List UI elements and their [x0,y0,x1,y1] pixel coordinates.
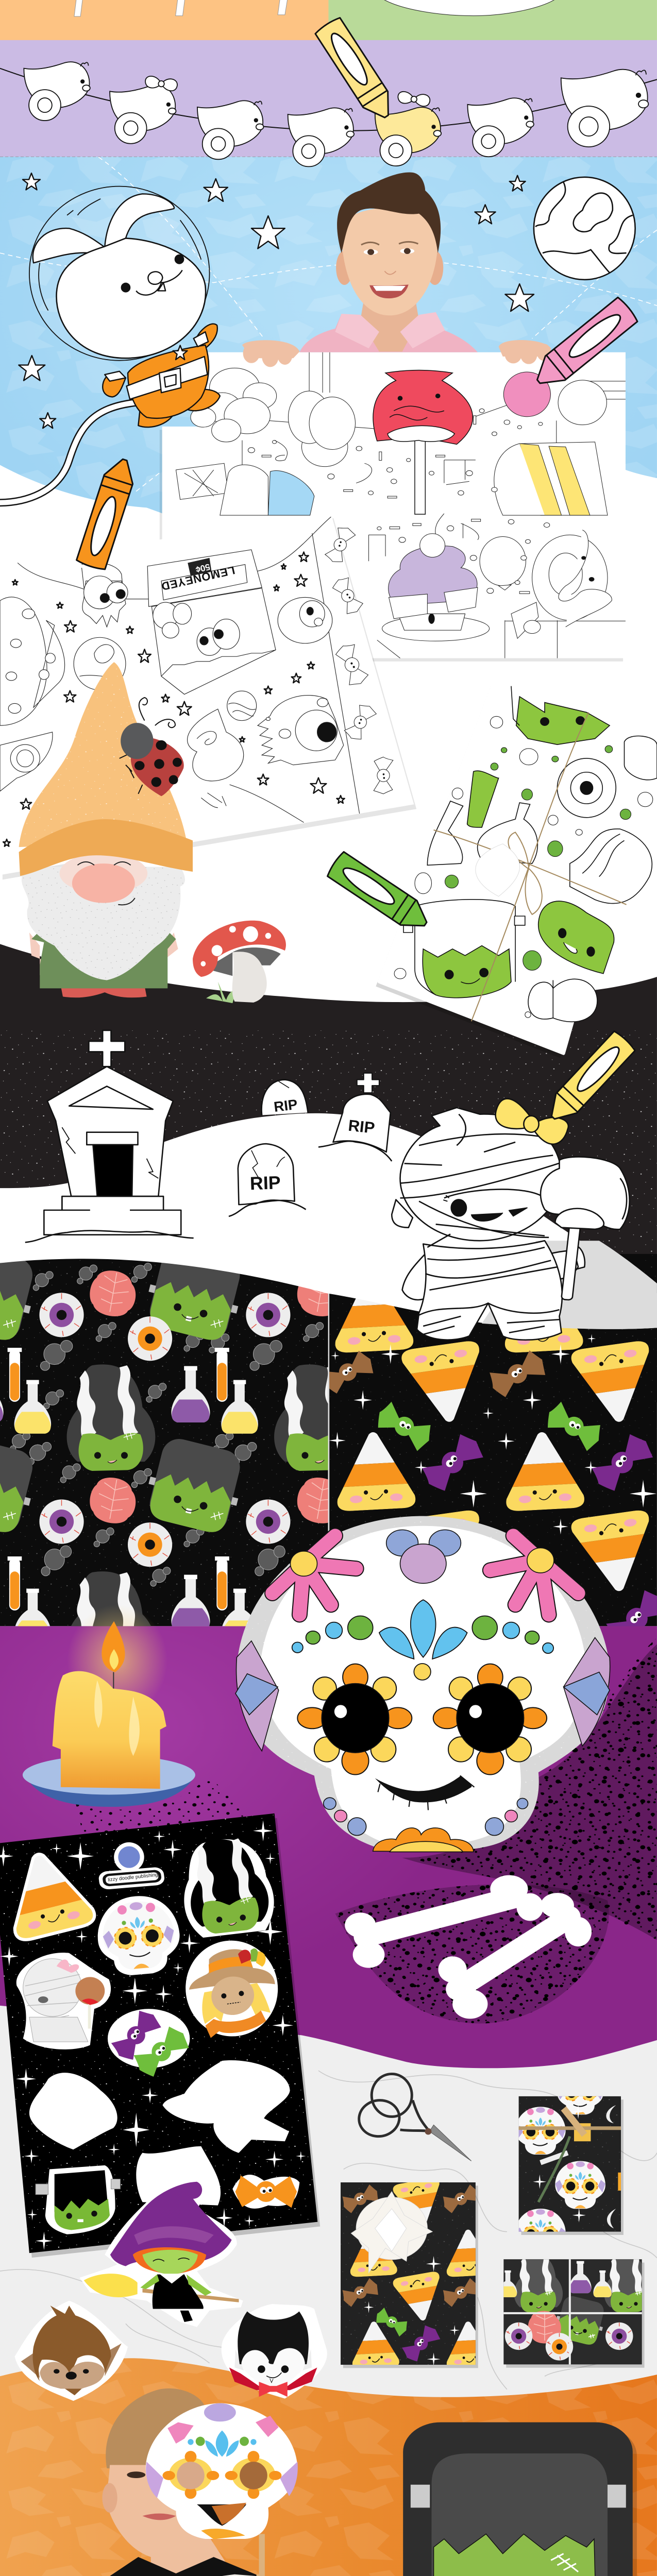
sheet 2 small stars [3,552,345,846]
gnome [19,662,193,997]
scene: coloring sheets, gnome, package [0,455,657,1058]
package [376,681,653,1058]
planet [534,177,635,280]
RIP text [249,1096,376,1194]
lemonade sign: 50¢ [194,562,211,574]
sheet 2 [0,514,416,879]
mushroom [193,921,286,1003]
sheet 1 line art [176,352,626,515]
skull top ornament [290,1530,554,1583]
RIP text: RIP [347,1116,376,1137]
yellow crayon [314,16,399,124]
dashed flight paths [0,157,657,493]
sticker: publisher logo: lizzy doodle publishing [108,1872,158,1883]
candle [23,1605,195,1807]
skull chin ornaments [324,1798,528,1852]
twine and heart tag [434,713,627,1021]
sticker: bride [179,1835,277,1939]
green crayon [326,851,434,936]
sticker: publisher logo [98,1842,165,1890]
sticker: scarecrow [179,1935,284,2042]
white hill [0,1113,657,1329]
sticker: vampire [222,2304,327,2399]
mask stick lower [257,2574,262,2576]
hill shadow [482,1241,657,1329]
left pattern panel [0,1259,328,1626]
sticker: witch [79,2180,243,2327]
bunny hose [0,402,136,503]
sticker sparkles [0,1820,293,2036]
RIP text: RIP [273,1096,298,1115]
purple background [0,1626,657,2068]
black splatter [75,1638,657,2024]
crossed bones [345,1875,592,2019]
sticker sheet blanks [29,2060,290,2206]
pink crayon [529,296,639,394]
boy photo [299,172,478,352]
boy collar [110,2557,260,2576]
skull top flowers [273,1536,578,1615]
scene: plates and balloons [16,2574,637,2576]
scene: top strip [0,0,657,662]
yellow crayon [543,1030,636,1127]
skull right eye [433,1664,547,1775]
gift wrap: candy corn [341,2182,478,2368]
skull side diamonds [235,1638,610,1751]
sticker: sugar skull [94,1893,183,1978]
white gift bow [351,2192,432,2273]
boy hands [242,340,551,367]
mummy candy apple [541,1157,630,1300]
scene: stickers and gift wrap on marble [14,2060,653,2576]
mask stick [259,2534,265,2576]
pink balloon [503,372,607,425]
music notes [275,440,476,485]
top colour bands [0,0,657,591]
scissors [356,2074,471,2161]
sticker: candy corn [0,1841,103,1947]
sticker: mummy [16,1953,111,2049]
chick chain [0,62,657,166]
sheet 1 [160,352,626,662]
sticks [74,0,288,16]
sheet 2 outlined candies [324,524,393,794]
astronaut bunny [29,187,220,427]
sheet 2 line art [0,517,360,822]
gravestones [229,1073,392,1216]
sticker: wrapped candies [108,2006,193,2081]
scene: graveyard and patterns [0,1030,657,1678]
mummy bow [496,1099,568,1144]
sugar skull [235,1516,610,1852]
stars [19,173,534,428]
sticker sheet [0,1814,320,2258]
sticker: werewolf [14,2301,128,2401]
frankenstein plate [403,2422,637,2576]
scene: day of the dead [0,1516,657,2258]
boy with mask: hair and face [102,2388,234,2576]
package art [403,686,657,1022]
sheet sparkles [16,2069,306,2250]
orange crayon [76,455,139,571]
right pattern panel [318,1254,657,1652]
lemonade sign: LEMONEYED [160,564,236,593]
package dots [394,716,653,1018]
RIP text: RIP [249,1172,281,1194]
gift wrap: sugar skulls [518,2096,624,2235]
sticker: orange candy [232,2175,299,2209]
sheet 1 confetti [369,519,550,594]
gift wrap: bride [503,2259,644,2368]
skull mouth [375,1775,474,1810]
skeleton hoodie [16,2574,306,2576]
white plate [383,0,555,16]
confetti [248,409,543,498]
orange background [0,2358,657,2576]
sheet 1 lower art [377,514,626,658]
ladybug [120,698,184,796]
skull forehead drops [292,1600,553,1680]
sugar skull mask [146,2403,298,2539]
mausoleum [25,1030,194,1242]
black night background [0,944,657,1402]
mummy [392,1108,585,1340]
marble background [0,1958,657,2473]
skull left eye [297,1664,412,1775]
sticker: frankenstein [36,2165,120,2234]
candy apple [373,370,473,514]
panel divider [328,1290,329,1626]
